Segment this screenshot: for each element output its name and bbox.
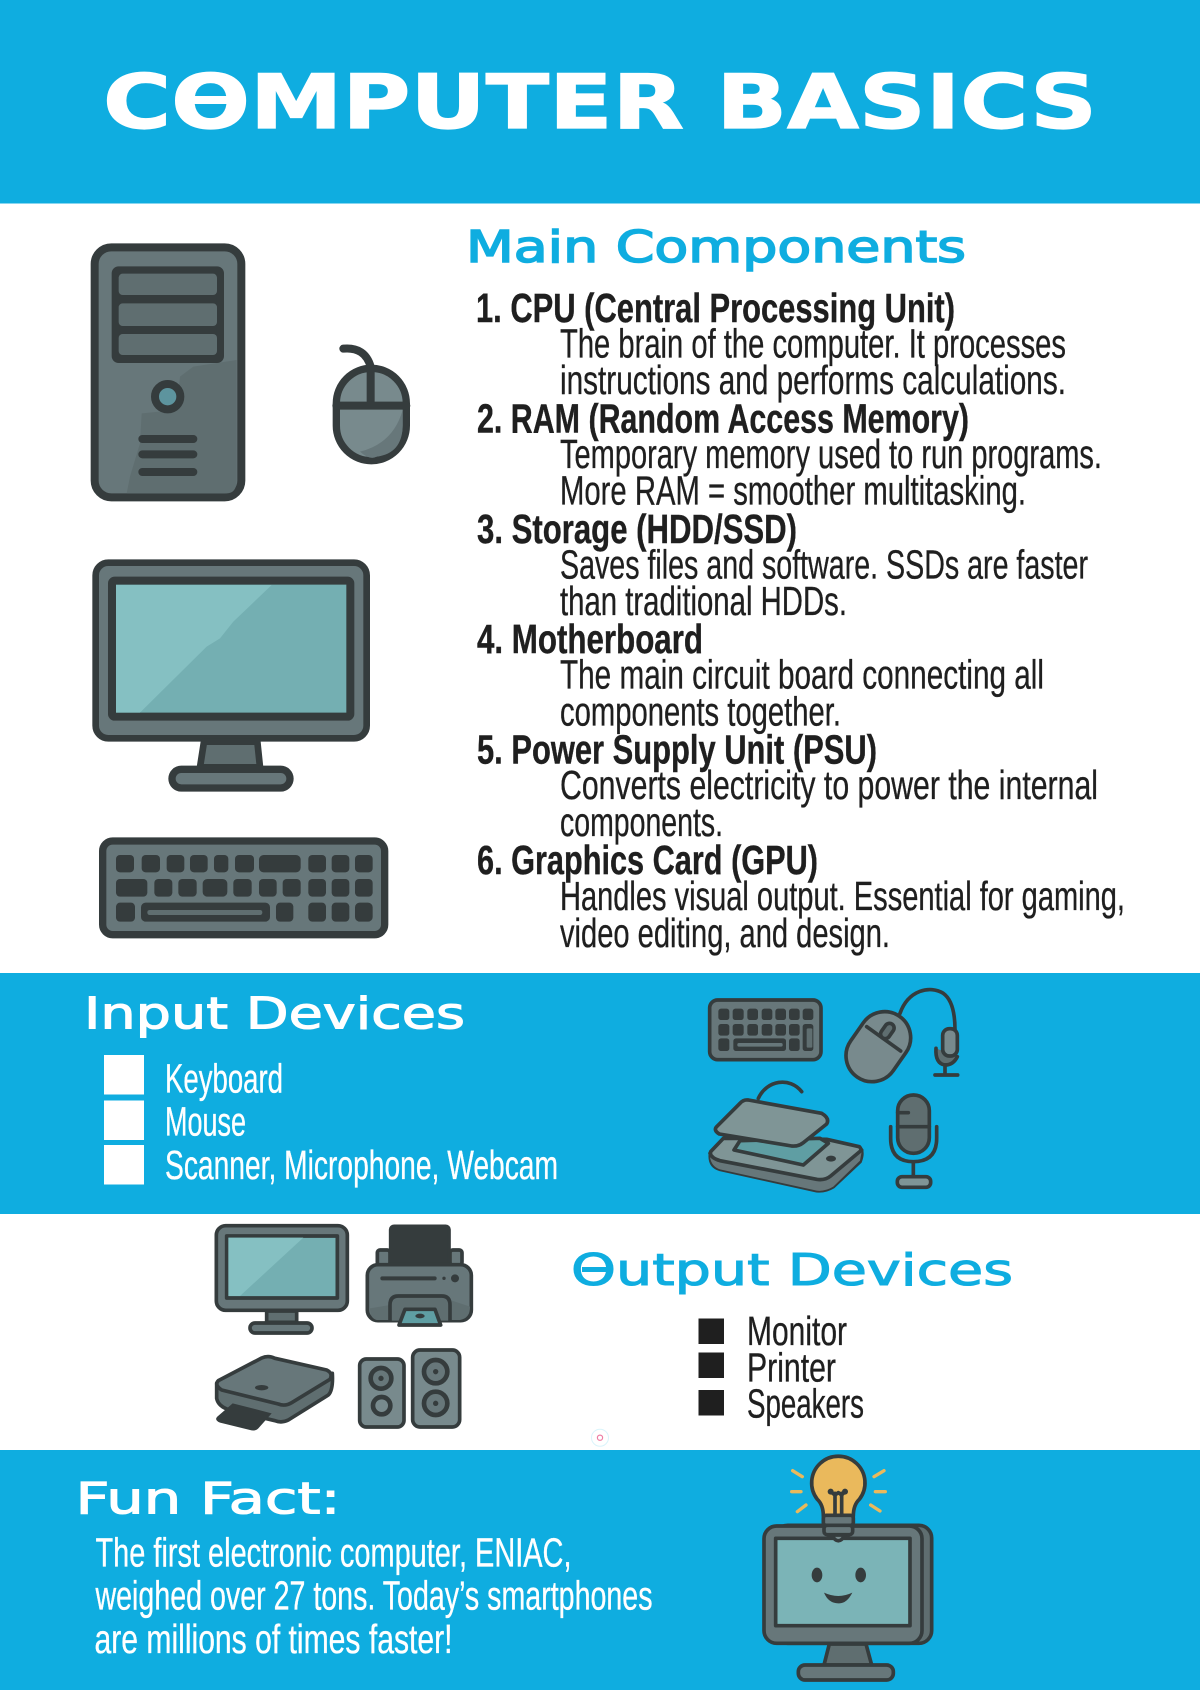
text block: fun fact body: are millions of times faster!	[94, 1616, 452, 1662]
marker: small circle	[592, 1429, 608, 1446]
icon: computer tower	[95, 247, 241, 497]
title: COMPUTER BASICS	[103, 58, 1097, 146]
text block: component list: components.	[560, 799, 723, 845]
icon: small keyboard	[710, 1000, 821, 1060]
list item: speakers: Speakers	[747, 1381, 864, 1427]
text block: component list: 1. CPU (Central Processing Unit)	[476, 285, 955, 331]
heading: output devices: Output Devices	[571, 1245, 1013, 1296]
text block: component list: 3. Storage (HDD/SSD)	[477, 506, 797, 552]
list item: keyboard	[104, 1055, 283, 1101]
list item: mouse: Mouse	[165, 1099, 246, 1145]
text block: fun fact body: weighed over 27 tons. Today’s smartphones	[95, 1572, 652, 1618]
heading: fun fact: Fun Fact:	[76, 1473, 340, 1524]
heading: main components: Main Components	[466, 222, 966, 273]
icon: corded mouse	[836, 990, 958, 1092]
icon: drive	[216, 1357, 332, 1431]
text block: component list: video editing, and design.	[560, 910, 890, 956]
list item: scanner, microphone, webcam: Scanner, Microphone, Webcam	[165, 1142, 558, 1188]
text block: component list	[476, 285, 1125, 956]
text block: component list: components together.	[560, 688, 841, 734]
icon: small monitor	[216, 1226, 347, 1333]
icon: desktop monitor	[96, 563, 367, 788]
list item: speakers	[698, 1381, 864, 1427]
icon: printer	[367, 1226, 471, 1325]
icon: output device set	[216, 1226, 471, 1431]
list item: scanner, microphone, webcam	[104, 1142, 558, 1188]
text block: component list: 5. Power Supply Unit (PSU)	[477, 727, 877, 773]
icon: microphone	[891, 1095, 937, 1187]
panel: fun fact	[0, 1450, 1200, 1690]
text block: component list: More RAM = smoother multitasking.	[560, 468, 1026, 514]
icon: smiling monitor with light bulb	[764, 1456, 932, 1680]
heading: input devices: Input Devices	[84, 988, 465, 1040]
icon: input device set	[710, 990, 958, 1191]
text block: fun fact body: The first electronic computer, ENIAC,	[96, 1530, 572, 1576]
icon: speakers	[360, 1350, 460, 1427]
icon: scanner	[710, 1082, 862, 1191]
list item: mouse	[104, 1099, 246, 1145]
text block: component list: 4. Motherboard	[477, 616, 703, 662]
list item: printer: Printer	[747, 1345, 836, 1391]
panel: main components	[466, 222, 1125, 956]
list item: keyboard: Keyboard	[165, 1055, 283, 1101]
icon: keyboard	[103, 841, 385, 935]
text block: component list: 2. RAM (Random Access Memory)	[477, 395, 969, 441]
icon: computer mouse	[336, 348, 406, 461]
panel: title banner	[0, 0, 1200, 204]
panel: input devices	[0, 973, 1200, 1214]
list item: printer	[698, 1345, 836, 1391]
panel: output devices	[216, 1226, 1013, 1431]
text block: component list: 6. Graphics Card (GPU)	[477, 837, 818, 883]
text block: component list: than traditional HDDs.	[560, 578, 847, 624]
text block: fun fact body	[94, 1530, 652, 1662]
list item: monitor	[698, 1308, 847, 1354]
list item: monitor: Monitor	[747, 1308, 847, 1354]
